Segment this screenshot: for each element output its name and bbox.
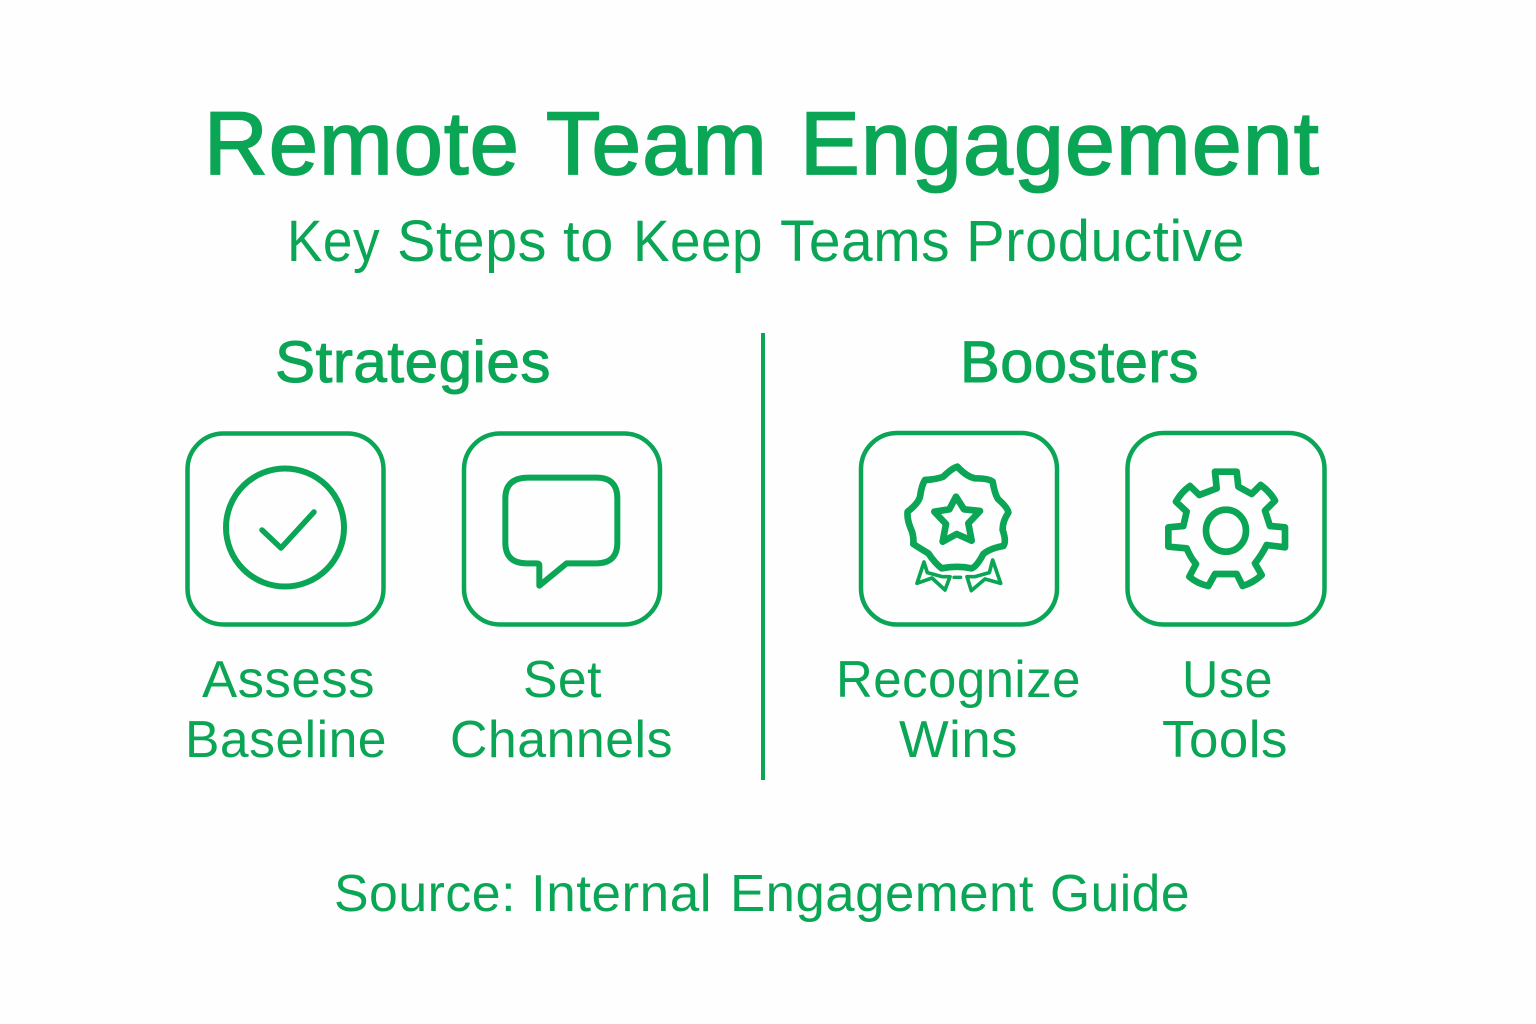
card: Assess Baseline <box>185 434 387 769</box>
subtitle: Keep <box>633 209 763 274</box>
heading: Strategies: Strategies <box>275 330 551 395</box>
title <box>204 93 1320 193</box>
icon: gear <box>1168 472 1285 586</box>
center divider <box>761 333 765 780</box>
label: Use Tools: Tools <box>1162 711 1288 769</box>
subtitle: to <box>563 209 614 274</box>
heading: Boosters: Boosters <box>960 330 1199 395</box>
icon box: assess <box>188 434 384 624</box>
icon: award badge <box>907 467 1008 591</box>
source note: Engagement <box>730 865 1034 923</box>
title: Team <box>546 93 768 193</box>
label: Recognize Wins: Wins <box>899 711 1018 769</box>
card: Set Channels <box>450 434 673 769</box>
icon: speech bubble <box>505 478 617 586</box>
label: Assess Baseline: Assess <box>202 651 375 709</box>
subtitle: Productive <box>966 209 1245 274</box>
label: Use Tools: Use <box>1182 651 1273 709</box>
label: Set Channels <box>450 651 673 769</box>
source note: Source: <box>334 865 516 923</box>
card: Use Tools <box>1128 433 1324 769</box>
subtitle: Teams <box>780 209 950 274</box>
subtitle: Key <box>287 209 380 274</box>
label: Recognize Wins: Recognize <box>836 651 1081 709</box>
label: Set Channels: Channels <box>450 711 673 769</box>
label: Set Channels: Set <box>523 651 602 709</box>
subtitle: Steps <box>397 209 547 274</box>
subtitle <box>287 209 1245 274</box>
label: Assess Baseline: Baseline <box>185 711 387 769</box>
source note <box>334 865 1190 923</box>
source note: Guide <box>1050 865 1190 923</box>
title: Engagement <box>800 93 1320 193</box>
source note: Internal <box>531 865 712 923</box>
label: Recognize Wins <box>836 651 1081 769</box>
label: Assess Baseline <box>185 651 387 769</box>
card: Recognize Wins <box>836 433 1081 769</box>
icon: check circle <box>226 468 344 586</box>
icon box: tools <box>1128 433 1324 624</box>
label: Use Tools <box>1162 651 1288 769</box>
icon box: channels <box>464 434 660 624</box>
title: Remote <box>204 93 520 193</box>
icon box: recognize <box>861 433 1057 624</box>
